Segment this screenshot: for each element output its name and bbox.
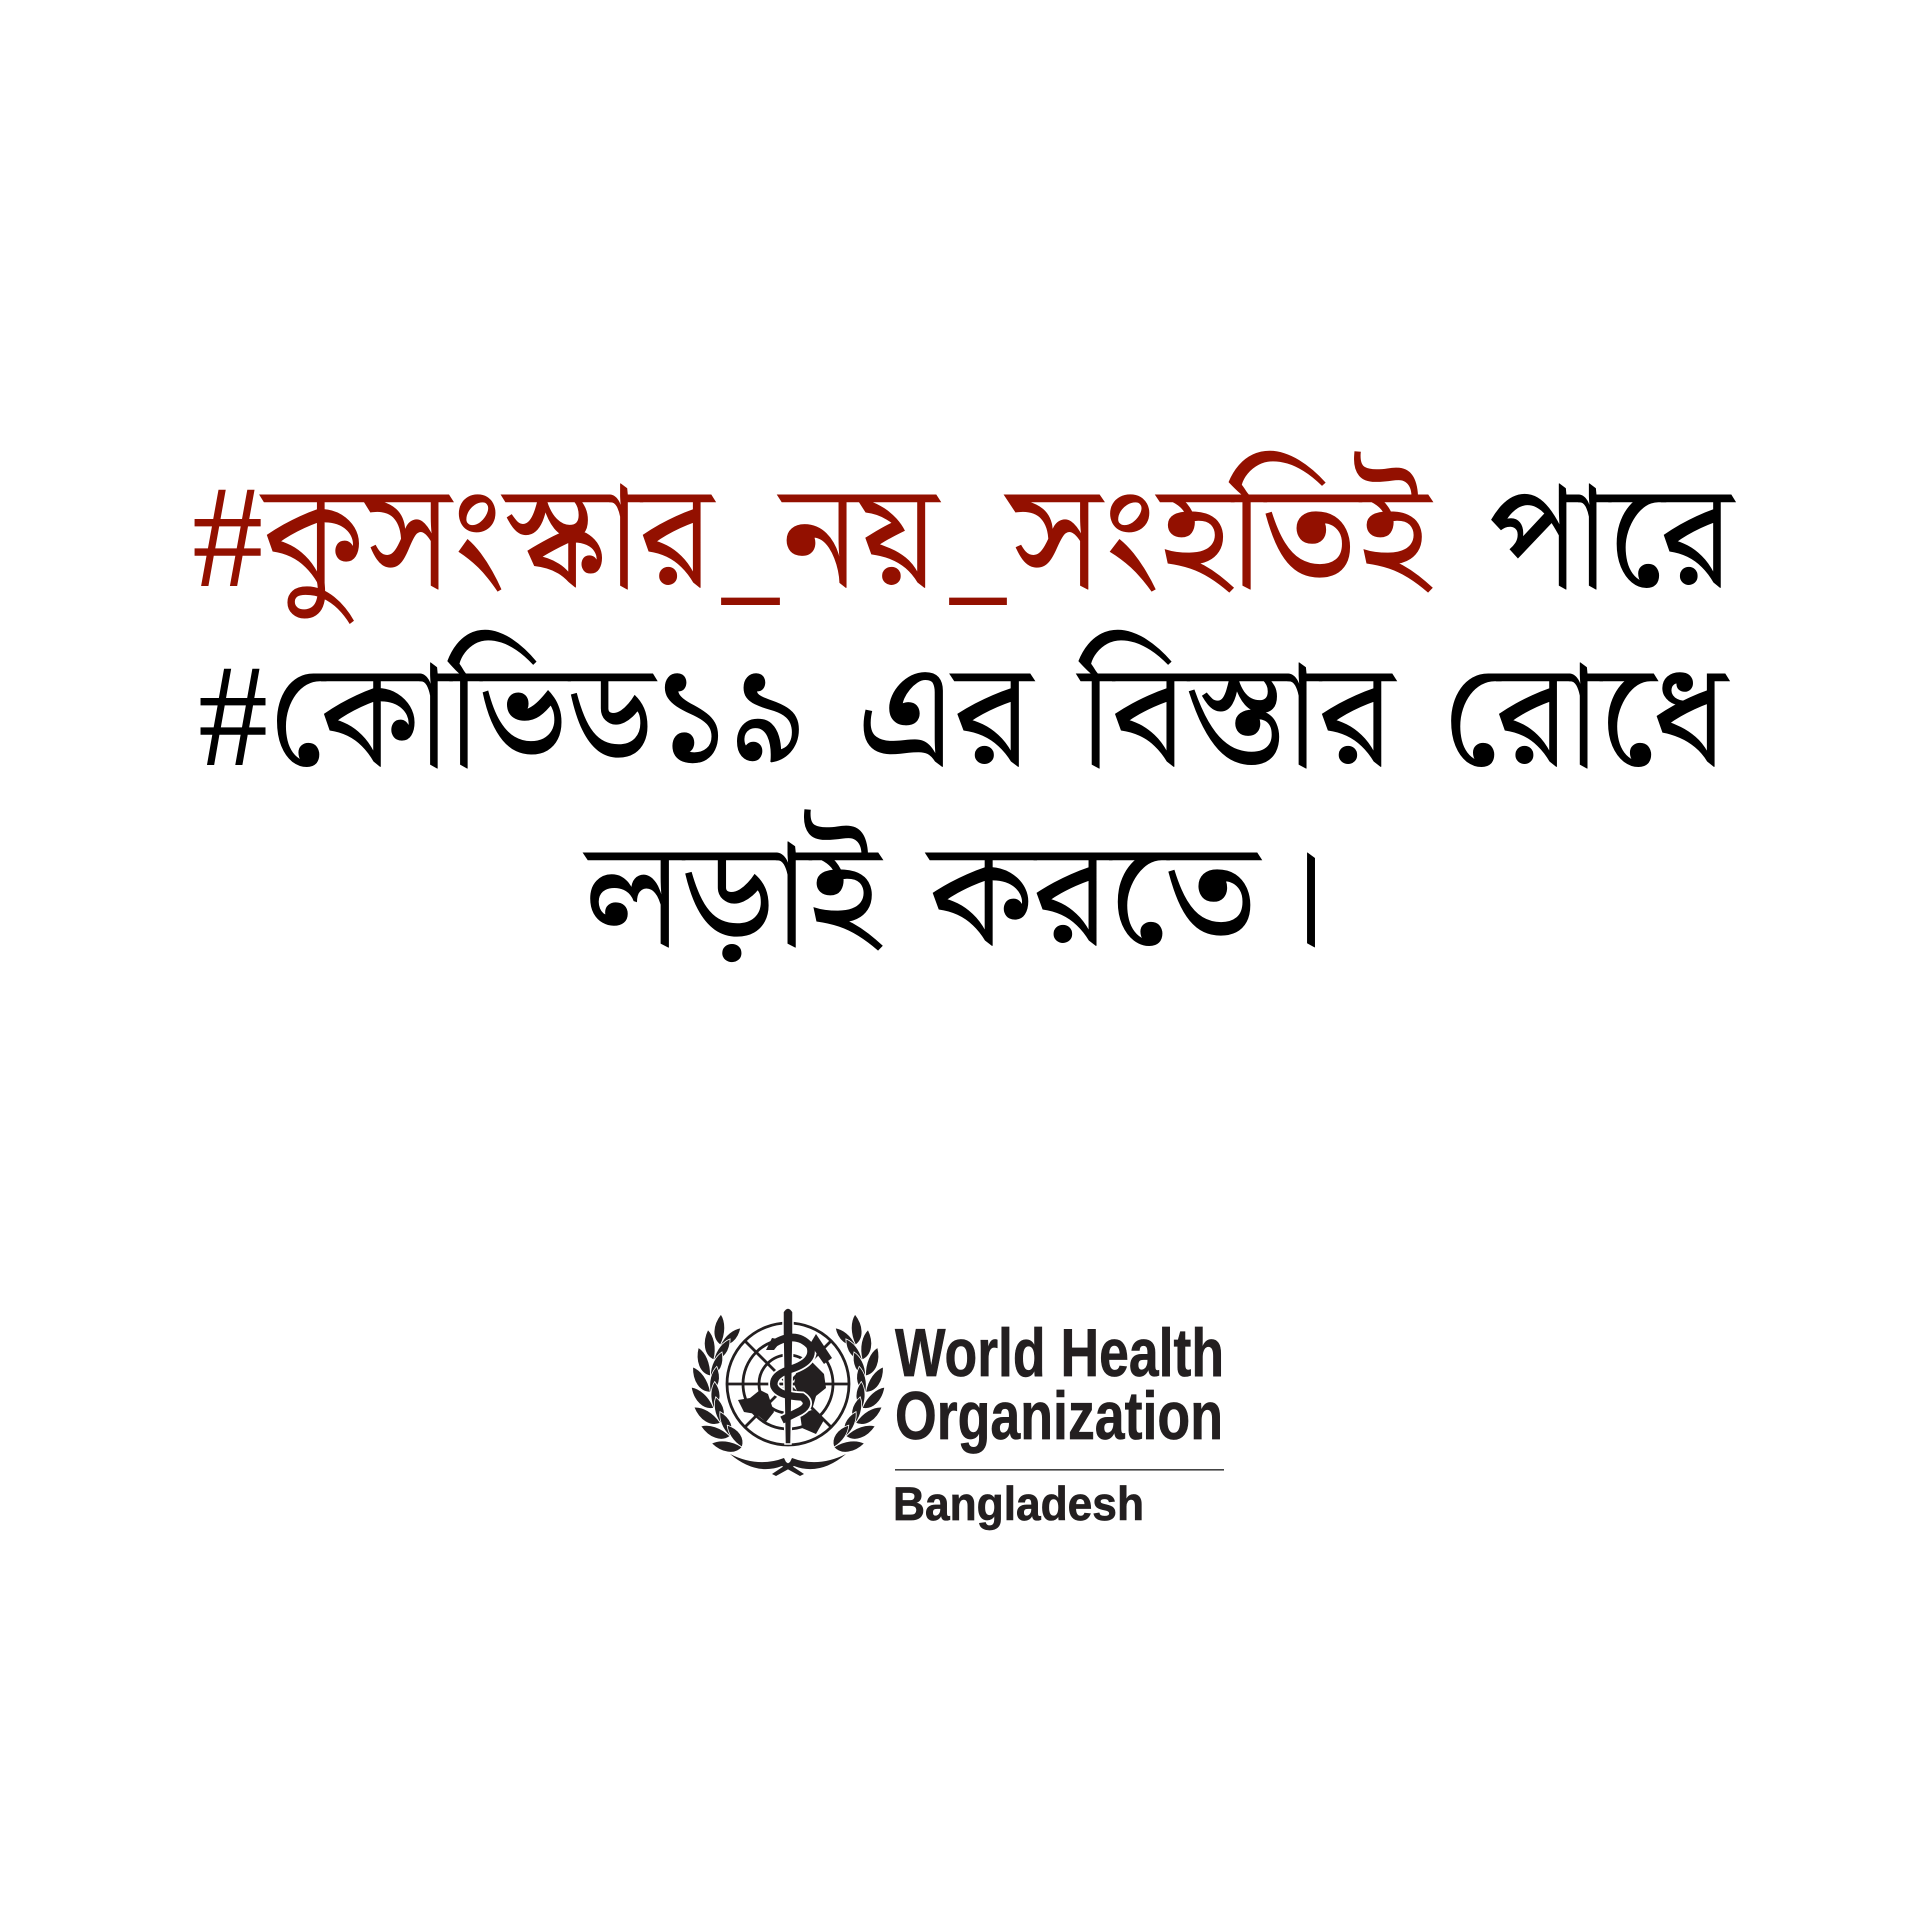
headline line 1: নয় xyxy=(776,455,942,618)
headline line 2 xyxy=(198,629,1731,797)
headline line 1: সংহতিই xyxy=(1003,450,1434,618)
logo wordmark line 2: Organization xyxy=(895,1378,1223,1454)
headline line 1: _ xyxy=(948,455,1007,618)
headline line 3: করতে xyxy=(924,813,1262,976)
headline line 2: এর xyxy=(856,634,1036,797)
headline text xyxy=(192,450,1737,976)
headline line 1: পারে xyxy=(1489,455,1737,618)
continents xyxy=(738,1362,826,1434)
logo country name: Bangladesh xyxy=(893,1477,1144,1530)
headline line 3: । xyxy=(1260,813,1328,976)
headline line 2: #কোভিড১৯ xyxy=(198,629,808,797)
staff and serpent xyxy=(766,1308,832,1444)
right wreath xyxy=(772,1314,885,1476)
icon: WHO emblem xyxy=(691,1308,885,1476)
logo wordmark line 1: World Health xyxy=(895,1315,1224,1391)
logo divider xyxy=(895,1469,1224,1471)
headline line 1 xyxy=(192,450,1737,625)
headline line 3 xyxy=(582,808,1328,976)
globe rings xyxy=(727,1323,849,1445)
headline line 1: #কুসংস্কার xyxy=(192,455,717,625)
headline line 1: _ xyxy=(720,455,780,618)
headline line 2: বিস্তার xyxy=(1075,629,1398,797)
headline line 2: রোধে xyxy=(1442,634,1731,797)
headline line 3: লড়াই xyxy=(582,808,884,976)
logo: World Health Organization Bangladesh xyxy=(691,1308,1224,1530)
left wreath xyxy=(691,1314,804,1476)
